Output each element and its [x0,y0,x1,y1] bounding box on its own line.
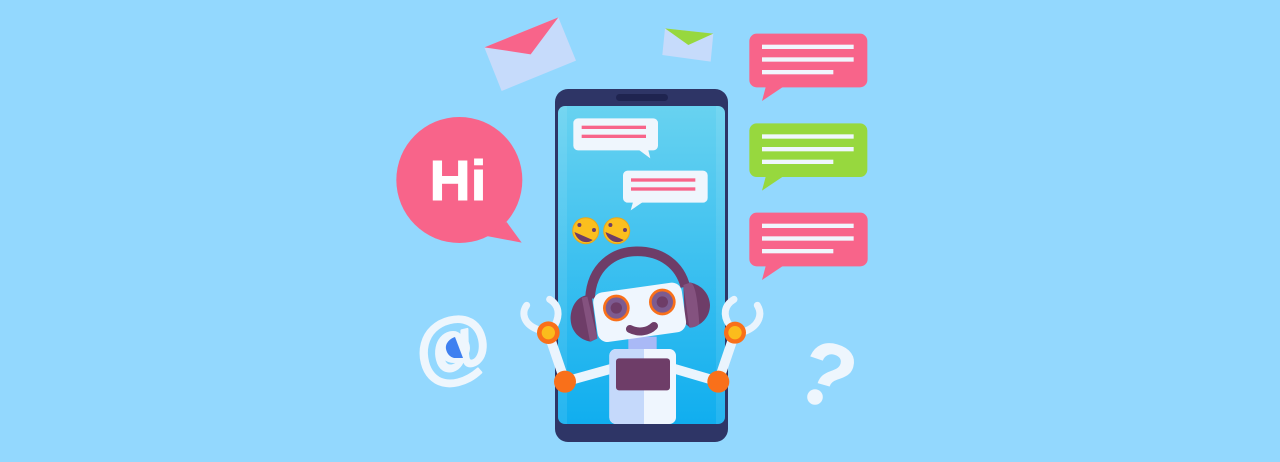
speech bubble: Hi: Hi [430,149,486,213]
icon: small envelope [662,28,713,62]
emoji left [573,218,599,244]
emoji right [604,218,630,244]
left ear cup [571,296,597,342]
head [592,281,687,343]
icon: at sign: @ [405,294,500,398]
icon: question mark: ? [791,321,867,426]
robot [524,251,760,424]
right ear cup [683,282,710,328]
phone [555,89,728,442]
chat bubble: pink lower [749,213,868,280]
right claw [725,299,760,332]
chatbot illustration [396,17,868,442]
eye left [603,295,630,321]
left arm [548,333,612,382]
chat bubble: pink top [749,34,867,101]
right arm [674,333,735,382]
phone chat bubble 1 [573,118,658,158]
joints [537,321,746,393]
left claw [524,299,558,330]
mouth [630,326,654,331]
icon: question mark [807,343,854,405]
icon: large envelope [484,17,576,91]
phone chat bubble 2 [623,171,708,210]
chat bubble: green [749,123,867,191]
eye right [649,289,676,315]
neck [628,337,657,350]
headband [590,251,685,298]
speech bubble: Hi [396,117,522,243]
body [609,349,676,424]
